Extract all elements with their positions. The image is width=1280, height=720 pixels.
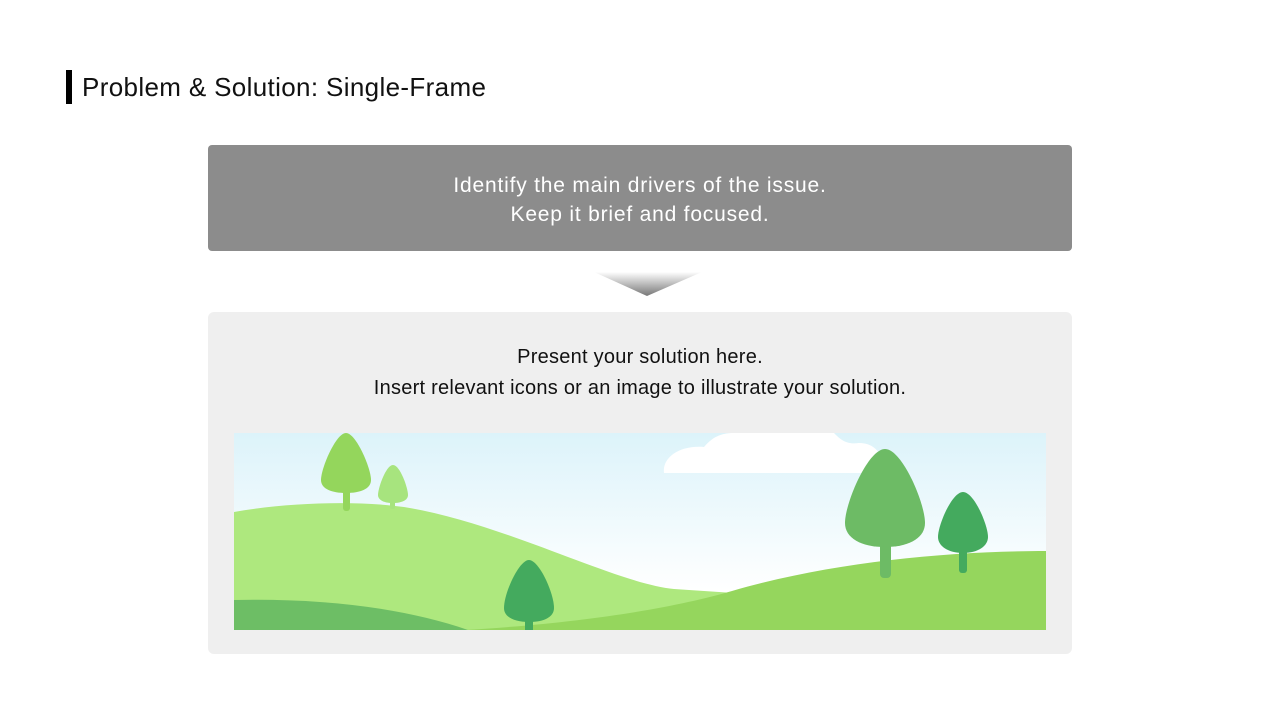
cloud (664, 433, 884, 473)
dark hill (234, 600, 468, 630)
title: Problem & Solution: Single-Frame (82, 72, 486, 102)
right hill (465, 551, 1046, 630)
illustration: landscape (234, 433, 1046, 630)
panel: problem: Keep it brief and focused. (511, 203, 769, 226)
left hill (234, 503, 834, 630)
arrow (598, 274, 698, 296)
solution text: Insert relevant icons or an image to illustrate your solution. (374, 377, 906, 399)
solution text: Present your solution here. (517, 346, 763, 368)
trees (321, 433, 988, 630)
panel: problem: Identify the main drivers of the issue. (453, 174, 827, 197)
panel: problem (208, 145, 1072, 251)
solution text (374, 346, 906, 399)
panel: solution (208, 312, 1072, 654)
